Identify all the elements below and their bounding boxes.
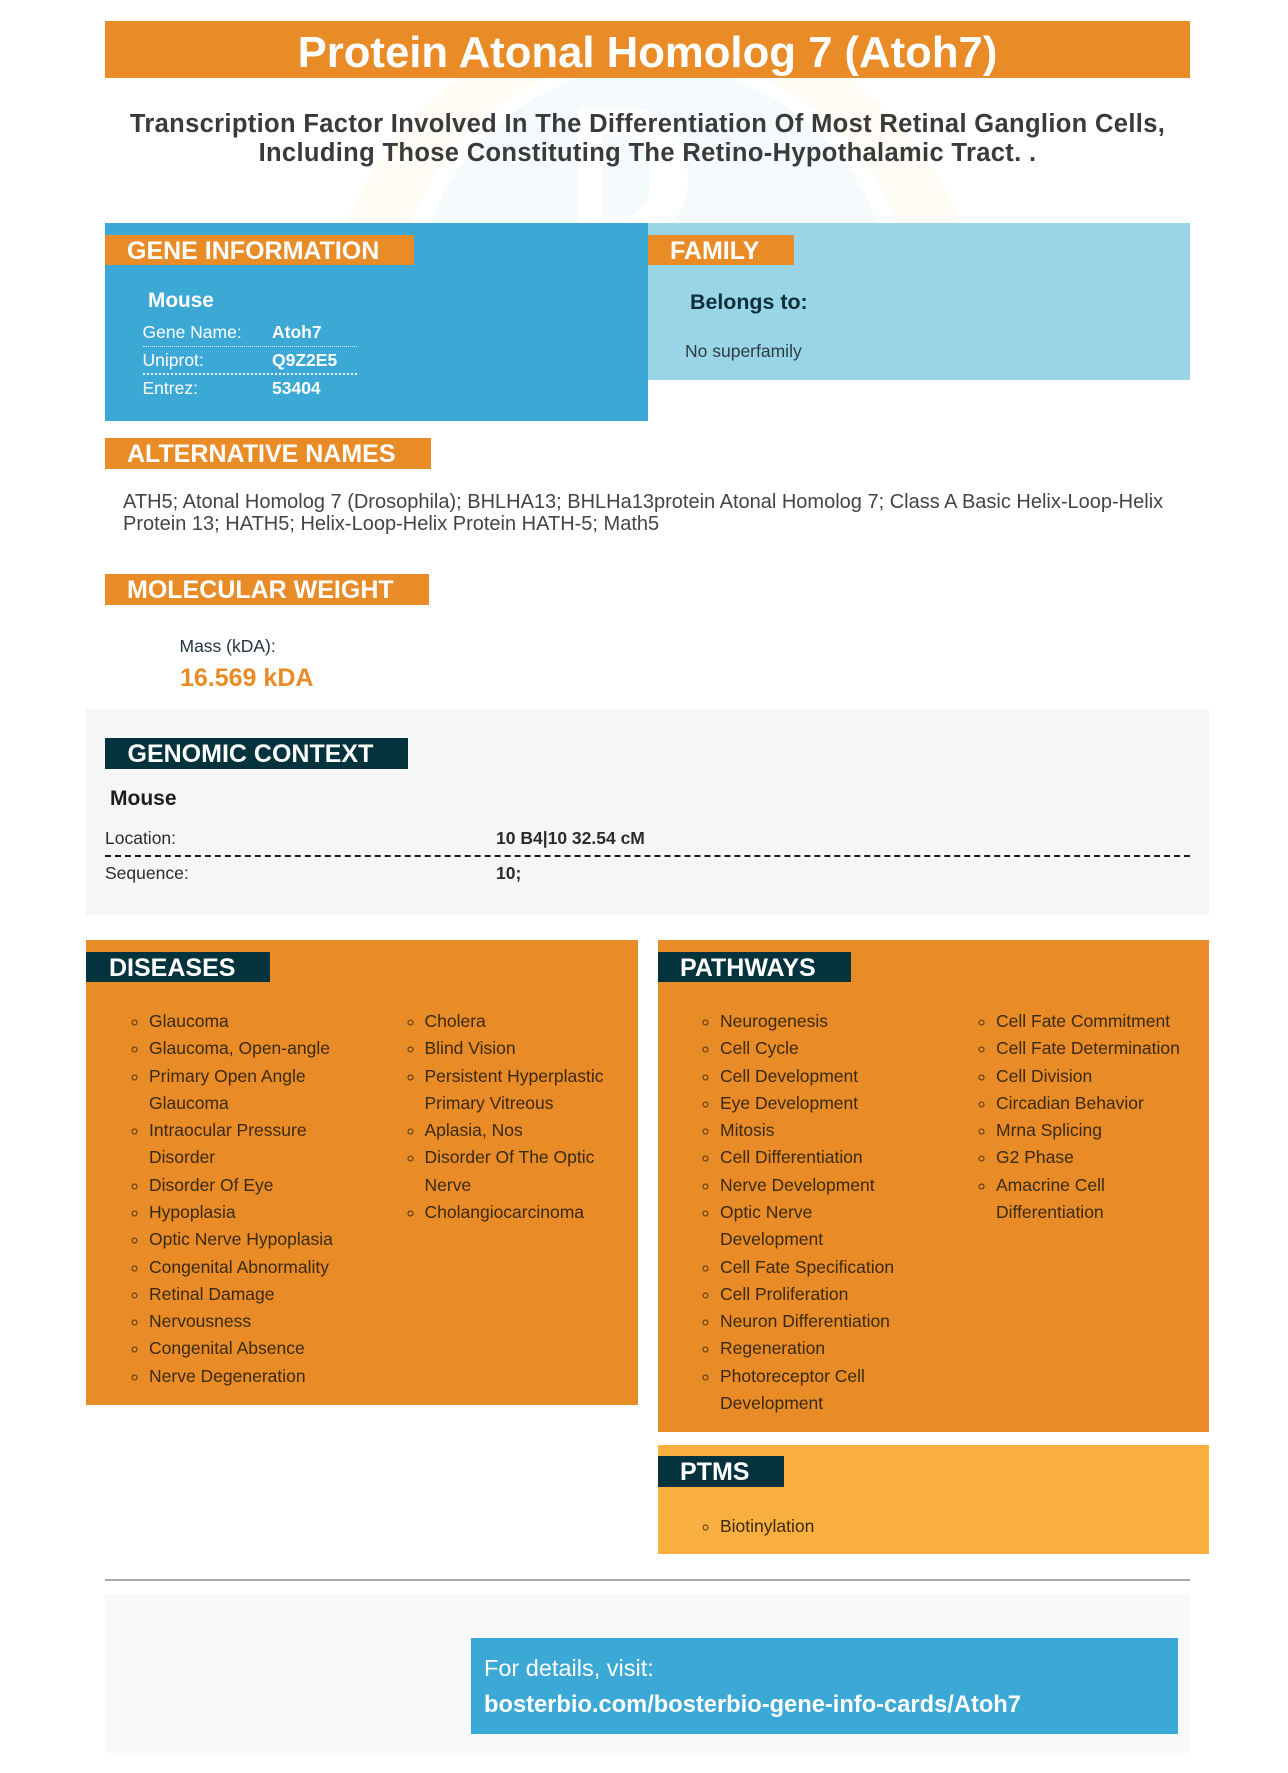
diseases list column 2: Primary Vitreous	[424, 1093, 554, 1113]
pathways list column 2: Cell Fate Commitment	[996, 1011, 1170, 1031]
alternative names text	[123, 490, 1163, 534]
diseases list column 2: Cholera	[424, 1011, 486, 1031]
location row: 10 B4|10 32.54 cM	[496, 828, 645, 848]
pathways list column 1: Mitosis	[720, 1120, 774, 1140]
heading: ptms	[658, 1456, 784, 1487]
diseases list column 1: Congenital Absence	[149, 1338, 305, 1358]
panel: family	[648, 223, 1190, 380]
heading: family: FAMILY	[670, 237, 759, 265]
species label: Mouse	[110, 787, 177, 810]
pathways list column 1: Photoreceptor Cell	[720, 1366, 865, 1386]
diseases list column 2	[408, 1011, 603, 1222]
callout: details link: For details, visit:	[484, 1655, 654, 1681]
pathways list column 1: Cell Fate Specification	[720, 1257, 894, 1277]
pathways list column 1: Development	[720, 1229, 823, 1249]
pathways list column 1: Cell Differentiation	[720, 1147, 863, 1167]
gene name row: Gene Name:	[142, 322, 242, 342]
pathways list column 2: Differentiation	[996, 1202, 1104, 1222]
diseases list column 1: Glaucoma, Open-angle	[149, 1038, 330, 1058]
diseases list column 2: Nerve	[424, 1175, 471, 1195]
pathways list column 1: Cell Cycle	[720, 1038, 799, 1058]
diseases list column 2: Cholangiocarcinoma	[424, 1202, 584, 1222]
ptms list: Biotinylation	[720, 1516, 814, 1536]
alternative names text: Protein 13; HATH5; Helix-Loop-Helix Protein HATH-5; Math5	[123, 512, 659, 534]
uniprot row: Uniprot:	[142, 350, 204, 370]
diseases list column 1: Nerve Degeneration	[149, 1366, 306, 1386]
pathways list column 2: Amacrine Cell	[996, 1175, 1105, 1195]
pathways list column 1: Development	[720, 1393, 823, 1413]
title	[105, 21, 1190, 78]
species label: Mouse	[148, 289, 214, 312]
alternative names text: ATH5; Atonal Homolog 7 (Drosophila); BHLHA13; BHLHa13protein Atonal Homolog 7; Class A Basic Helix-Loop-Helix	[123, 490, 1163, 512]
heading: pathways: PATHWAYS	[680, 954, 816, 982]
heading: family	[648, 235, 794, 265]
heading: ptms: PTMS	[680, 1458, 749, 1486]
sequence row: Sequence:	[105, 863, 189, 883]
mass value: 16.569 kDA	[180, 664, 313, 692]
pathways list column 2: Cell Division	[996, 1066, 1092, 1086]
superfamily value: No superfamily	[685, 341, 802, 361]
diseases list column 2: Disorder Of The Optic	[424, 1147, 594, 1167]
diseases list column 1: Intraocular Pressure	[149, 1120, 307, 1140]
mass label: Mass (kDA):	[180, 636, 276, 656]
belongs to label: Belongs to:	[690, 290, 808, 314]
subtitle	[130, 110, 1165, 167]
location row: Location:	[105, 828, 176, 848]
pathways list column 1	[702, 1011, 894, 1413]
pathways list column 1: Cell Development	[720, 1066, 858, 1086]
subtitle: Transcription Factor Involved In The Differentiation Of Most Retinal Ganglion Cells,	[130, 110, 1165, 138]
pathways list column 1: Regeneration	[720, 1338, 825, 1358]
diseases list column 1: Primary Open Angle	[149, 1066, 306, 1086]
callout: details link	[471, 1638, 1178, 1734]
heading: gene information: GENE INFORMATION	[127, 237, 379, 265]
diseases list column 1: Glaucoma	[149, 1093, 229, 1113]
background watermark logo	[347, 78, 961, 223]
callout: details link: bosterbio.com/bosterbio-gene-info-cards/Atoh7	[484, 1692, 1021, 1718]
sequence row: 10;	[496, 863, 521, 883]
panel: genomic context	[86, 709, 1209, 915]
uniprot row: Q9Z2E5	[272, 350, 337, 370]
pathways list column 2: Mrna Splicing	[996, 1120, 1102, 1140]
pathways list column 1: Neurogenesis	[720, 1011, 828, 1031]
pathways list column 1: Optic Nerve	[720, 1202, 812, 1222]
diseases list column 1: Optic Nerve Hypoplasia	[149, 1229, 333, 1249]
entrez row: Entrez:	[142, 378, 198, 398]
diseases list column 1: Congenital Abnormality	[149, 1257, 329, 1277]
pathways list column 1: Eye Development	[720, 1093, 858, 1113]
heading: diseases: DISEASES	[109, 954, 235, 982]
uniprot row	[143, 349, 357, 375]
panel: pathways	[658, 940, 1209, 1432]
panel: diseases	[86, 940, 638, 1405]
diseases list column 2: Blind Vision	[424, 1038, 516, 1058]
heading: alternative names: ALTERNATIVE NAMES	[127, 440, 396, 468]
diseases list column 2: Aplasia, Nos	[424, 1120, 523, 1140]
gene name row: Atoh7	[272, 322, 322, 342]
diseases list column 1: Nervousness	[149, 1311, 251, 1331]
pathways list column 1: Nerve Development	[720, 1175, 875, 1195]
pathways list column 2: G2 Phase	[996, 1147, 1074, 1167]
title: Protein Atonal Homolog 7 (Atoh7)	[298, 28, 997, 77]
entrez row: 53404	[272, 378, 321, 398]
panel: gene information	[105, 223, 648, 421]
subtitle: Including Those Constituting The Retino-Hypothalamic Tract. .	[259, 139, 1036, 167]
location row	[105, 827, 1190, 857]
diseases list column 1: Glaucoma	[149, 1011, 229, 1031]
pathways list column 2: Cell Fate Determination	[996, 1038, 1180, 1058]
pathways list column 1: Neuron Differentiation	[720, 1311, 890, 1331]
pathways list column 2: Circadian Behavior	[996, 1093, 1144, 1113]
diseases list column 1: Disorder	[149, 1147, 215, 1167]
diseases list column 1: Disorder Of Eye	[149, 1175, 273, 1195]
entrez row	[142, 378, 321, 398]
pathways list column 2	[978, 1011, 1180, 1222]
heading: genomic context: GENOMIC CONTEXT	[128, 740, 373, 768]
heading: diseases	[86, 952, 270, 982]
panel: footer	[105, 1594, 1190, 1753]
diseases list column 2: Persistent Hyperplastic	[424, 1066, 603, 1086]
gene name row	[143, 321, 357, 347]
heading: molecular weight: MOLECULAR WEIGHT	[127, 576, 394, 604]
diseases list column 1: Retinal Damage	[149, 1284, 274, 1304]
diseases list column 1	[132, 1011, 333, 1386]
diseases list column 1: Hypoplasia	[149, 1202, 236, 1222]
panel: ptms	[658, 1445, 1209, 1554]
heading: pathways	[658, 952, 851, 982]
pathways list column 1: Cell Proliferation	[720, 1284, 848, 1304]
sequence row	[105, 863, 521, 883]
